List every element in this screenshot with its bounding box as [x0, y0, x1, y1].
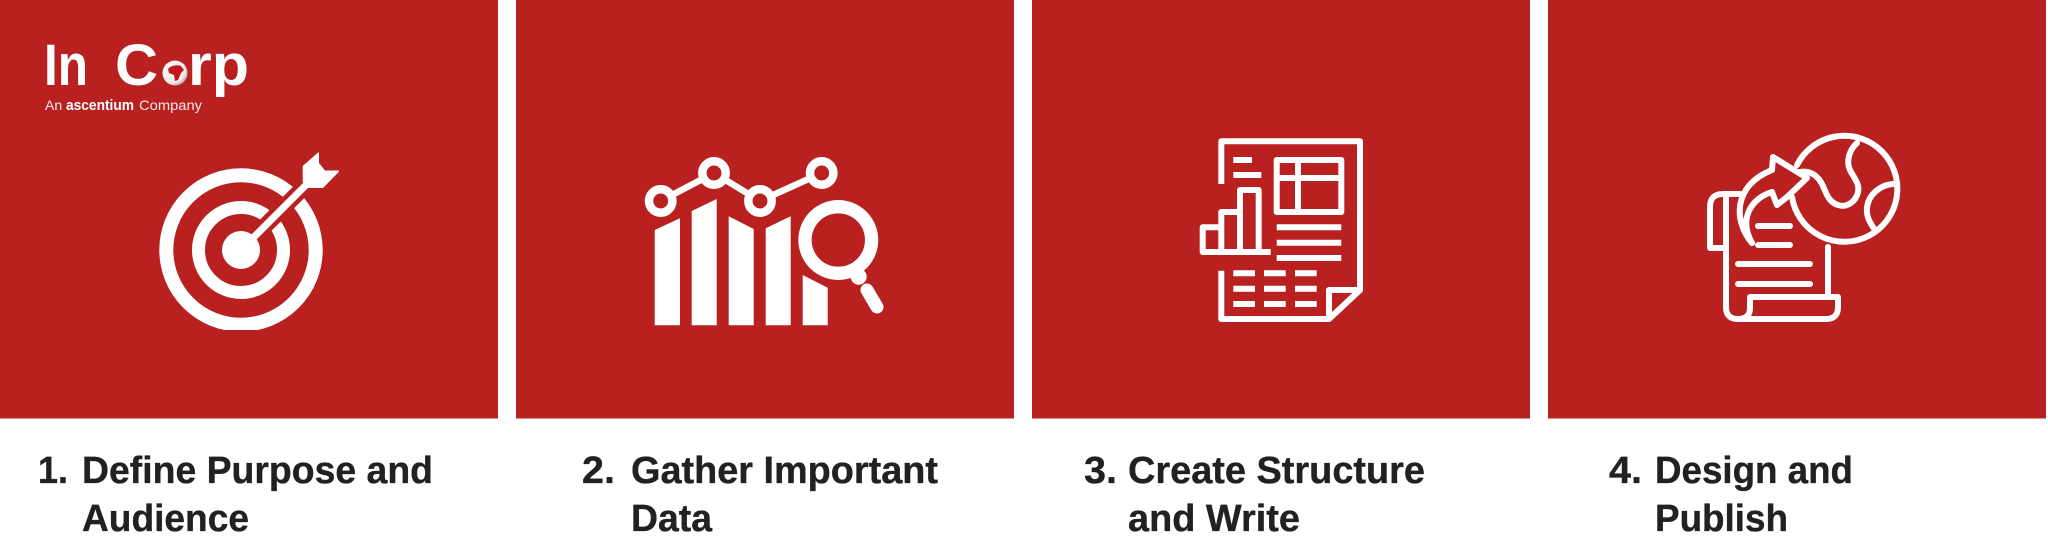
heading: step 2: Gather Important [631, 450, 938, 492]
icon: globe in logo [162, 60, 188, 86]
icon: document with table and chart [1203, 141, 1360, 319]
logo: InCorp: An [45, 97, 62, 113]
heading: step 1 [38, 450, 433, 540]
heading: step 1: 1. [38, 450, 68, 492]
logo: InCorp: ascentium [66, 98, 134, 114]
heading: step 1: Define Purpose and [82, 450, 433, 492]
logo: InCorp: Company [139, 97, 202, 113]
heading: step 4: 4. [1609, 450, 1642, 492]
icon: target with arrow [166, 152, 339, 325]
heading: step 4: Publish [1655, 498, 1788, 540]
heading: step 2: Data [631, 498, 713, 540]
logo: InCorp [44, 33, 249, 114]
heading: step 4 [1609, 450, 1853, 540]
heading: step 1: Audience [82, 498, 249, 540]
logo: InCorp: C [115, 33, 158, 98]
heading: step 2: 2. [582, 450, 615, 492]
heading: step 3: and Write [1128, 498, 1300, 540]
logo: InCorp: rp [188, 33, 249, 98]
heading: step 4: Design and [1655, 450, 1853, 492]
logo: InCorp: In [44, 33, 88, 98]
heading: step 3 [1084, 450, 1425, 540]
icon: document with globe and arrow [1710, 136, 1897, 319]
heading: step 3: Create Structure [1128, 450, 1425, 492]
panel: step 1 background [0, 0, 498, 418]
heading: step 3: 3. [1084, 450, 1117, 492]
panel: step 4 background [1548, 0, 2046, 418]
panel: step 2 background [516, 0, 1014, 418]
panel: step 3 background [1032, 0, 1530, 418]
heading: step 2 [582, 450, 938, 540]
icon: bar chart with magnifier [649, 161, 877, 325]
